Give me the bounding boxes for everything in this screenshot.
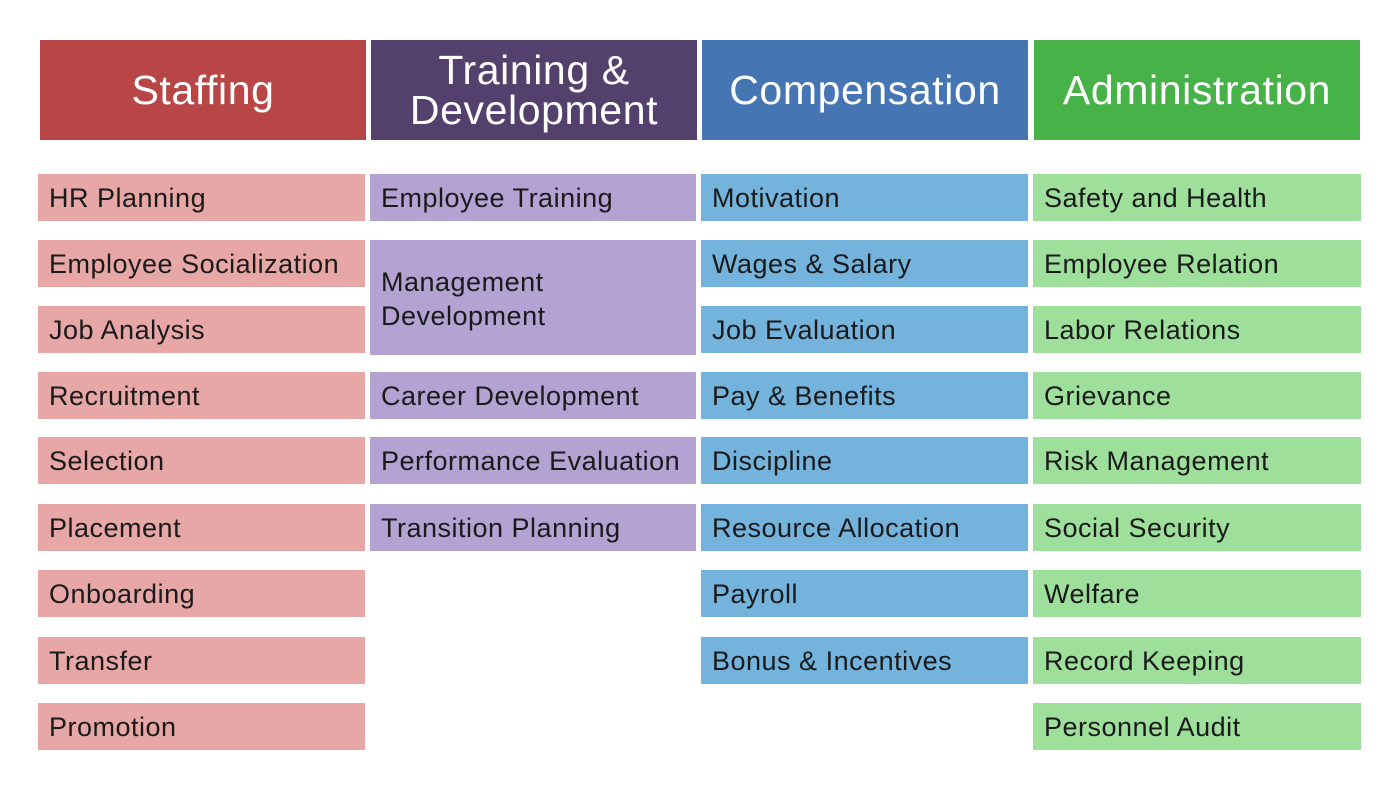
header: Staffing — [40, 40, 366, 140]
item — [38, 437, 365, 484]
item: Career Development — [381, 381, 639, 411]
item: Transition Planning — [381, 513, 621, 543]
item: Transfer — [49, 646, 153, 676]
item — [701, 437, 1028, 484]
item — [370, 240, 696, 355]
item: Labor Relations — [1044, 315, 1241, 345]
item — [38, 504, 365, 551]
item: Job Analysis — [49, 315, 205, 345]
item: Pay & Benefits — [712, 381, 896, 411]
item — [1033, 240, 1361, 287]
item: Record Keeping — [1044, 646, 1245, 676]
item: Employee Socialization — [49, 249, 339, 279]
item — [1033, 504, 1361, 551]
item — [701, 504, 1028, 551]
item — [701, 570, 1028, 617]
item: Management — [381, 266, 544, 296]
column: staffing items — [38, 174, 365, 750]
item: Motivation — [712, 183, 840, 213]
item: Promotion — [49, 712, 177, 742]
item — [370, 504, 696, 551]
item: Welfare — [1044, 579, 1140, 609]
header: Administration — [1034, 40, 1360, 140]
item: Job Evaluation — [712, 315, 896, 345]
item: Grievance — [1044, 381, 1172, 411]
item — [1033, 637, 1361, 684]
item: Safety and Health — [1044, 183, 1267, 213]
item: Payroll — [712, 579, 798, 609]
column: training items — [370, 174, 696, 551]
item: Selection — [49, 446, 165, 476]
item — [701, 240, 1028, 287]
item — [370, 437, 696, 484]
item — [701, 306, 1028, 353]
item: Development — [381, 300, 546, 330]
item: Personnel Audit — [1044, 712, 1241, 742]
item: Social Security — [1044, 513, 1230, 543]
item — [38, 703, 365, 750]
item: Risk Management — [1044, 446, 1269, 476]
item: Placement — [49, 513, 181, 543]
column: administration items — [1033, 174, 1361, 750]
item — [38, 570, 365, 617]
item: Discipline — [712, 446, 833, 476]
item: Bonus & Incentives — [712, 646, 952, 676]
item — [38, 637, 365, 684]
header: Training & Development: Development — [410, 87, 658, 133]
item — [1033, 372, 1361, 419]
item: Onboarding — [49, 579, 195, 609]
item: HR Planning — [49, 183, 206, 213]
header: Staffing: Staffing — [131, 67, 275, 113]
header: Training & Development: Training & — [438, 47, 630, 93]
item — [370, 174, 696, 221]
item: Employee Training — [381, 183, 613, 213]
header: Compensation: Compensation — [729, 67, 1001, 113]
item: Recruitment — [49, 381, 200, 411]
item — [38, 372, 365, 419]
item — [701, 637, 1028, 684]
header: Compensation — [702, 40, 1028, 140]
item: Employee Relation — [1044, 249, 1279, 279]
item — [38, 174, 365, 221]
item — [701, 372, 1028, 419]
header: Administration: Administration — [1063, 67, 1331, 113]
item — [38, 240, 365, 287]
item — [1033, 703, 1361, 750]
header: Training & Development — [371, 40, 697, 140]
item: Performance Evaluation — [381, 446, 680, 476]
item — [370, 372, 696, 419]
item: Resource Allocation — [712, 513, 960, 543]
item — [1033, 570, 1361, 617]
item — [1033, 437, 1361, 484]
column: compensation items — [701, 174, 1028, 684]
item — [1033, 174, 1361, 221]
item — [38, 306, 365, 353]
item — [1033, 306, 1361, 353]
item: Wages & Salary — [712, 249, 912, 279]
item — [701, 174, 1028, 221]
